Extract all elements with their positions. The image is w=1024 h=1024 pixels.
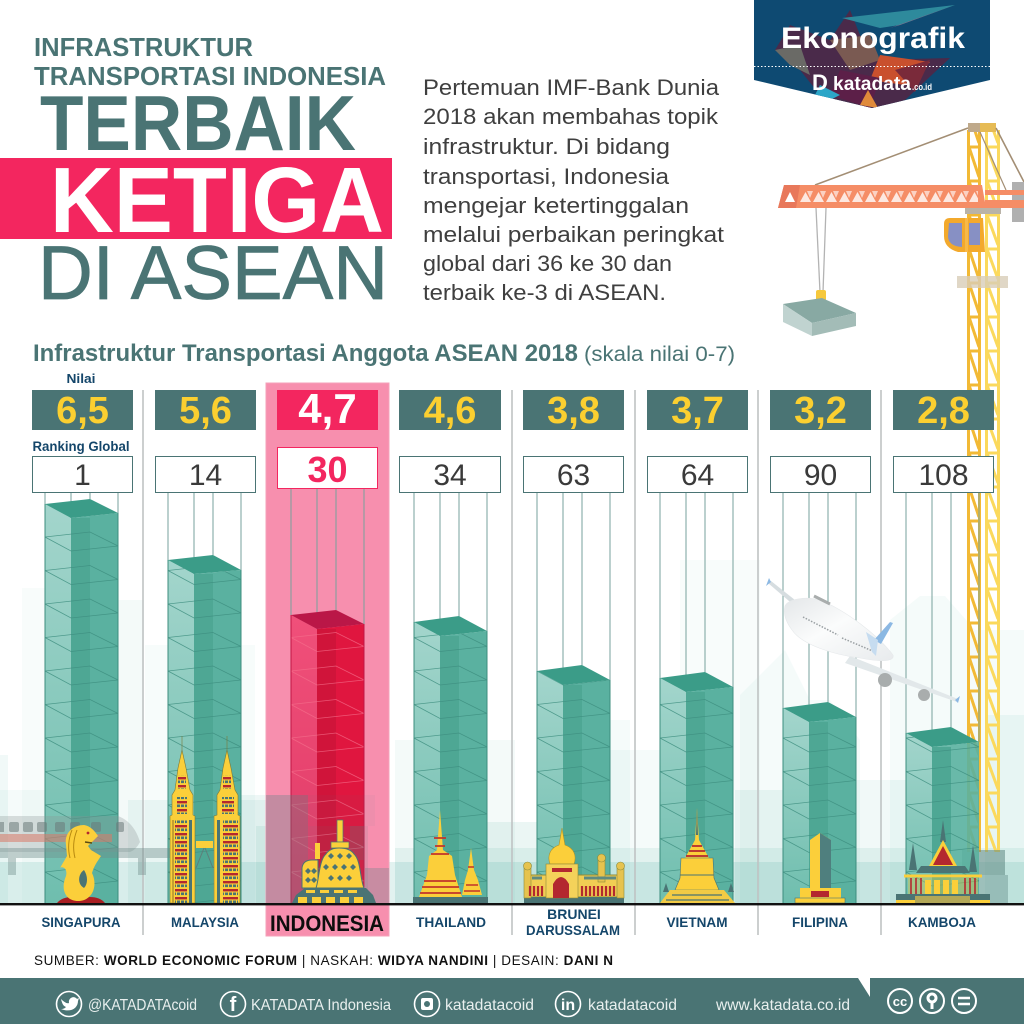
plane near wing: [845, 656, 958, 702]
country labels: KAMBOJA: [908, 914, 976, 930]
social: linkedin: in: [561, 997, 575, 1014]
column separators: [143, 390, 881, 935]
footer bar: [0, 978, 1024, 1024]
crane base: [962, 850, 1008, 903]
bar chart: infrastructure scores: [45, 499, 979, 903]
crane hoist hook: [816, 290, 826, 301]
temple central roof: [940, 820, 946, 842]
skybridge: [196, 841, 213, 868]
score row: 4,7: [298, 385, 357, 432]
left tower: [170, 736, 195, 903]
score row: 3,2: [794, 390, 847, 432]
landmark: Merlion: [57, 825, 105, 903]
rank row: 63: [557, 459, 590, 492]
score and rank boxes: [32, 372, 994, 492]
mosque portal: [546, 864, 578, 898]
banner logo: katadata: [833, 74, 911, 95]
bar: Singapura 6,5: [45, 499, 118, 903]
plane engines: [878, 673, 892, 687]
intro paragraph: melalui perbaikan peringkat: [423, 222, 725, 247]
plane fuselage: [784, 598, 893, 661]
intro paragraph: transportasi, Indonesia: [423, 164, 670, 189]
crane jib: [778, 182, 1024, 222]
source credit: SUMBER: WORLD ECONOMIC FORUM | NASKAH: WIDYA NANDINI | DESAIN: DANI N: [34, 953, 613, 968]
right tower: [214, 736, 240, 903]
kicker: [34, 32, 386, 91]
title block: [0, 32, 392, 316]
score row: 6,5: [56, 390, 109, 432]
train windows: [0, 822, 124, 832]
social: facebook: [220, 992, 391, 1016]
bar: Filipina 3,2: [783, 702, 856, 903]
country labels: INDONESIA: [270, 911, 384, 936]
illustration: tower crane: [778, 123, 1024, 903]
bar: Vietnam 3,7: [660, 672, 733, 903]
illustration: airplane: [766, 578, 960, 703]
train stripe: [0, 834, 112, 842]
rank row: [32, 448, 994, 492]
plane tail: [874, 622, 893, 644]
landmark: Brunei mosque: [524, 828, 624, 903]
plane windows: [803, 617, 875, 652]
website: www.katadata.co.id: [715, 997, 850, 1014]
bar: Indonesia 4,7: [291, 610, 364, 903]
headline band: Ketiga: KETIGA: [50, 148, 384, 252]
social: instagram: katadatacoid: [445, 997, 534, 1014]
intro paragraph: terbaik ke-3 di ASEAN.: [423, 280, 666, 305]
concrete load block: [783, 298, 856, 336]
bar: Kamboja 2,8: [906, 727, 979, 903]
country labels: BRUNEI: [547, 906, 601, 922]
bar: Malaysia 5,6: [168, 555, 241, 903]
landmark: Thai stupas: [413, 810, 488, 903]
social: instagram: [414, 992, 534, 1016]
crane platform: [957, 276, 1008, 288]
banner: Ekonografik: [754, 0, 990, 110]
social: facebook: KATADATA Indonesia: [251, 997, 391, 1014]
landmark: Rizal monument: [795, 833, 845, 903]
rank row: 30: [307, 449, 348, 490]
bar: Thailand 4,6: [414, 616, 487, 903]
banner title: Ekonografik: [781, 22, 965, 55]
intro paragraph: [423, 75, 725, 305]
bar: Brunei 3,8: [537, 665, 610, 903]
banner mosaic: [775, 5, 955, 110]
intro paragraph: global dari 36 ke 30 dan: [423, 251, 672, 276]
country labels: DARUSSALAM: [526, 922, 620, 938]
ground line: [0, 903, 1024, 905]
country labels: MALAYSIA: [171, 914, 239, 930]
guide lines under rank boxes: [45, 488, 979, 747]
score row: [32, 385, 994, 432]
small stupa: [302, 843, 320, 888]
illustration: elevated train: [0, 816, 170, 875]
main stupa: [316, 820, 364, 888]
intro paragraph: 2018 akan membahas topik: [423, 104, 719, 129]
rank row: 90: [804, 459, 837, 492]
train track: [0, 848, 170, 875]
plane wing far: [768, 581, 800, 607]
social: facebook: f: [230, 994, 237, 1016]
social: linkedin: katadatacoid: [588, 997, 677, 1014]
intro paragraph: infrastruktur. Di bidang: [423, 134, 670, 159]
country labels: VIETNAM: [666, 914, 728, 930]
temple base: [896, 894, 990, 903]
chart heading: Infrastruktur Transportasi Anggota ASEAN 2018: [33, 340, 578, 367]
score row: 3,7: [671, 390, 724, 432]
headline: Terbaik: TERBAIK: [40, 79, 356, 167]
label: Nilai: Nilai: [66, 372, 96, 386]
license icons: [888, 989, 976, 1013]
temple side spires: [909, 843, 977, 872]
kicker: TRANSPORTASI INDONESIA: [34, 61, 386, 91]
country labels: SINGAPURA: [42, 914, 120, 930]
chart heading: (skala nilai 0-7): [584, 343, 735, 366]
crane cables: [815, 128, 1024, 292]
country labels: THAILAND: [416, 914, 486, 930]
social: linkedin: [556, 992, 677, 1016]
mosque dome: [549, 828, 575, 864]
pale city skyline: [0, 560, 1024, 903]
social: twitter: [56, 992, 197, 1016]
highlight column: Indonesia: [266, 383, 389, 936]
landmark: Borobudur: [292, 820, 376, 903]
banner logo: .co.id: [912, 82, 932, 92]
kicker: INFRASTRUKTUR: [34, 32, 253, 62]
train body: [0, 816, 140, 852]
country labels: FILIPINA: [792, 914, 848, 930]
headline: Di ASEAN: DI ASEAN: [38, 231, 388, 316]
landmark: Cambodian temple: [896, 820, 990, 903]
crane cab: [944, 218, 985, 252]
country labels: [42, 906, 976, 938]
landmark: Petronas Towers: [170, 736, 240, 903]
crane mast: [967, 123, 1000, 852]
mosque arcades: [530, 886, 614, 896]
score row: 5,6: [179, 390, 232, 432]
score row: 2,8: [917, 390, 970, 432]
temple base: [292, 888, 376, 903]
rank row: 14: [189, 459, 222, 492]
intro paragraph: mengejar ketertinggalan: [423, 193, 689, 218]
rank row: 34: [433, 459, 467, 492]
banner logo: [812, 70, 932, 95]
mosque towers: [524, 854, 624, 898]
rank row: 1: [74, 459, 91, 492]
banner logo: D: [812, 70, 828, 95]
score row: 4,6: [424, 390, 476, 432]
score row: 3,8: [547, 390, 600, 432]
temple columns: [908, 878, 978, 896]
intro paragraph: Pertemuan IMF-Bank Dunia: [423, 75, 720, 100]
landmark: Vietnam pagoda: [660, 808, 735, 903]
label: Ranking Global: Ranking Global: [32, 439, 130, 454]
translucent skyline overlay on Indonesia column: [266, 795, 389, 903]
license icons: cc: [893, 994, 907, 1009]
rank row: 64: [681, 459, 714, 492]
rank row: 108: [918, 459, 969, 492]
social: twitter: @KATADATAcoid: [88, 997, 197, 1014]
